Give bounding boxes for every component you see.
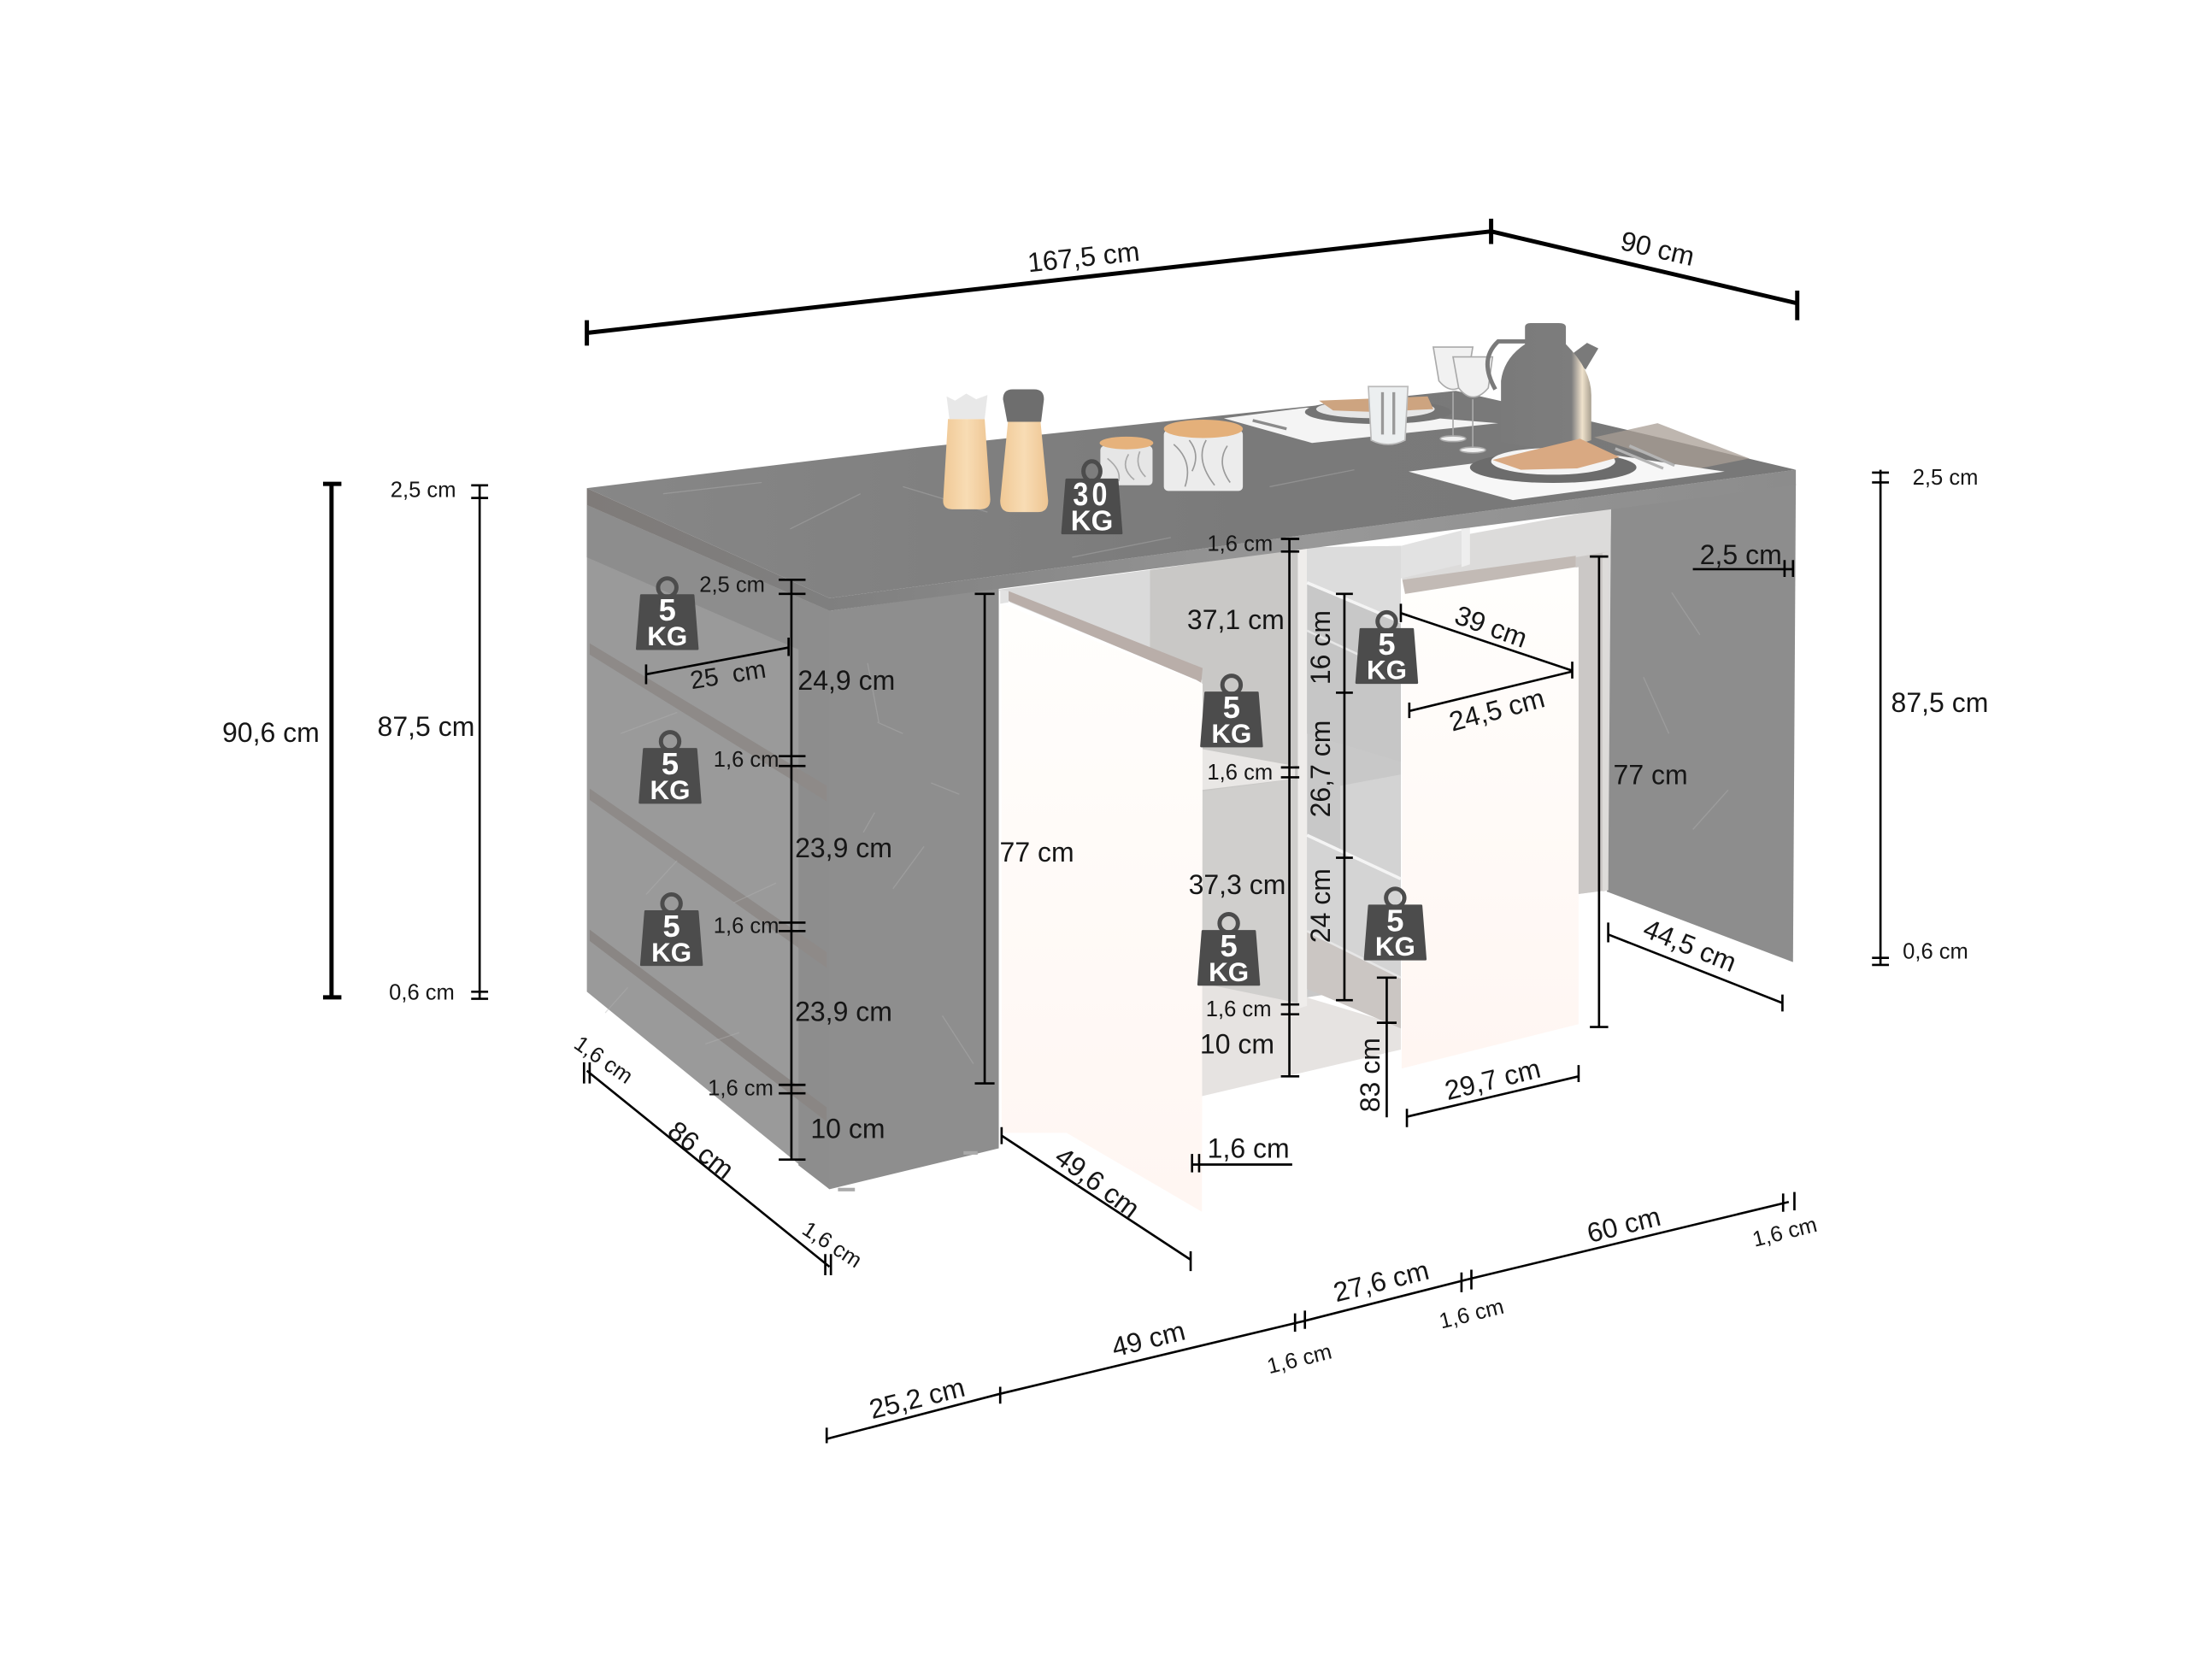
weight icon: 5 KG middle shelf [640,732,700,805]
weight icon: 5 KG drawer upper: KG [1367,656,1407,685]
dimension: right height stack: 87,5 cm [1891,687,1988,718]
dimension: shelving heights: 10 cm [810,1114,885,1144]
weight icon: 30 KG: KG [1071,505,1113,537]
dimension: bottom chain of widths: 1,6 cm [1437,1295,1506,1333]
shelf edges [590,644,827,1121]
weight icon: 5 KG middle shelf: KG [650,775,691,805]
table top front edge [587,470,1796,611]
dimension: drawer heights: 24 cm [1305,868,1336,943]
weight icon: 5 KG drawer lower: 5 [1386,903,1403,938]
weight icon: 5 KG drawer upper: 5 [1378,627,1396,662]
dimension: side panel thickness 2,5 cm [1693,539,1793,577]
dimension: shelving heights: 23,9 cm [795,997,892,1027]
dimension: overall depth 90 cm [1491,225,1797,321]
dimension: right height stack: 2,5 cm [1913,466,1978,490]
weight icon: 5 KG cabinet upper [1201,676,1262,749]
dimension: 44,5 cm [1609,913,1782,1011]
dimension: drawer heights: 16 cm [1305,610,1336,685]
weight icon: 5 KG middle shelf: 5 [662,746,679,781]
left cabinet interior [999,549,1401,1096]
weight icon: 5 KG drawer lower: KG [1375,932,1415,962]
dimension: centre compartment heights: 1,6 cm [1206,997,1272,1021]
dimension: centre compartment heights: 37,1 cm [1187,604,1285,635]
left door handle [1009,591,1203,683]
dimension: bottom chain of widths: 27,6 cm [1330,1255,1432,1308]
weight icon: 5 KG bottom shelf: KG [651,938,691,968]
dimension: left height stack: 87,5 cm [378,711,474,742]
dimension: door width 49,6 cm [1002,1127,1191,1271]
dimension: side depth 86 cm: 1,6 cm [797,1217,866,1273]
dimension: right door height 77 cm: 77 cm [1614,759,1688,790]
weight icon: 5 KG drawer lower [1365,889,1426,962]
dimension: left door height 77 cm: 77 cm [1000,837,1074,868]
dimension: 39 cm: 39 cm [1450,599,1532,654]
weight icon: 5 KG cabinet lower [1198,915,1259,987]
dimension: door thickness 1,6 cm [1192,1133,1292,1173]
dimension: right door height 77 cm [1590,556,1688,1027]
dimension: 39 cm [1401,599,1572,679]
marble jar small [1100,437,1153,485]
dimension: bottom chain of widths: 25,2 cm [866,1372,968,1425]
dimension: side depth 86 cm: 86 cm [662,1115,740,1185]
weight icon: 5 KG top shelf [637,579,697,651]
dimension: door thickness 1,6 cm: 1,6 cm [1208,1133,1290,1164]
left door [1000,590,1203,1212]
dimension: centre compartment heights: 1,6 cm [1207,532,1273,556]
dimension: shelf depth 25 cm: 25 cm [688,656,768,695]
dimension: left height stack: 2,5 cm [391,479,456,503]
centre divider panel [1297,547,1307,1009]
dimension: drawer heights: 26,7 cm [1305,721,1336,817]
tumbler glass [1368,386,1408,444]
dimension: 24,5 cm [1409,672,1572,738]
dimension: right height stack: 0,6 cm [1903,939,1968,963]
dimension: overall depth 90 cm: 90 cm [1618,225,1697,272]
dimension: 24,5 cm: 24,5 cm [1446,682,1548,738]
dimension: total height 90,6 cm [222,484,341,997]
dimension: left height stack [378,479,488,1004]
dimension: overall width 167,5 cm: 167,5 cm [1026,236,1141,278]
pepper mill dark [1000,390,1048,512]
weight icon: 30 KG: 30 [1073,476,1111,513]
dimension: shelving heights: 24,9 cm [797,665,895,696]
dimension: bottom chain of widths: 49 cm [1109,1315,1188,1363]
weight icon: 5 KG top shelf: 5 [659,592,676,627]
dimension: shelving heights: 1,6 cm [714,915,779,938]
weight icon: 5 KG bottom shelf: 5 [663,909,680,944]
dimension: centre compartment heights [1187,532,1299,1076]
dimension: 44,5 cm: 44,5 cm [1639,913,1741,978]
dimension: 29,7 cm [1407,1053,1579,1127]
dimension: shelving heights: 1,6 cm [714,748,779,772]
dimension: 83 cm: 83 cm [1355,1038,1385,1112]
marble jar large [1164,420,1243,491]
dimension: side depth 86 cm [569,1032,866,1275]
dimension: 29,7 cm: 29,7 cm [1442,1053,1544,1106]
back placemat and plate [1224,397,1498,443]
dimension: shelving heights: 23,9 cm [795,832,892,863]
right side panel [1607,484,1796,962]
dimension: shelving heights: 1,6 cm [708,1076,774,1100]
weight icon: 30 KG [1062,462,1121,537]
weight icon: 5 KG cabinet upper: 5 [1223,690,1240,725]
dimension: total height 90,6 cm: 90,6 cm [222,717,320,748]
open back interior [1397,508,1611,894]
wine glasses [1433,347,1492,453]
dimension: overall width 167,5 cm [587,219,1491,345]
dimension: bottom chain of widths: 60 cm [1584,1201,1663,1249]
weight icon: 5 KG cabinet lower: 5 [1221,928,1238,963]
dimension: door width 49,6 cm: 49,6 cm [1050,1141,1145,1224]
furniture: kitchen island [587,391,1796,1212]
weight icon: 5 KG drawer upper [1356,612,1417,685]
weight icon: 5 KG cabinet lower: KG [1209,957,1249,987]
kettle [1487,323,1598,448]
front placemat and plate [1409,438,1725,500]
dimension: side depth 86 cm: 1,6 cm [569,1032,637,1089]
dimension: shelving heights: 2,5 cm [699,573,765,597]
weight icon: 5 KG cabinet upper: KG [1211,719,1251,749]
right door [1402,556,1579,1068]
weight icon: 5 KG top shelf: KG [647,621,687,651]
dimension: left door height 77 cm [975,594,1074,1084]
dimension: 83 cm [1355,978,1397,1117]
dimension: shelf depth 25 cm [646,638,789,695]
dimension: left height stack: 0,6 cm [389,980,455,1004]
dimension: drawer heights [1305,594,1353,1000]
dimension: side panel thickness 2,5 cm: 2,5 cm [1700,539,1782,570]
left shelving side [587,505,829,1189]
weight icon: 5 KG bottom shelf [641,894,702,968]
pepper mill light [943,393,991,509]
dimension: bottom chain of widths: 1,6 cm [1750,1213,1820,1252]
dimension: right height stack [1872,466,1988,965]
right cabinet interior with drawers [1307,546,1401,1028]
dimension: centre compartment heights: 37,3 cm [1189,869,1285,900]
right door handle [1403,556,1576,594]
dimension: shelving heights [699,573,895,1160]
dimension: centre compartment heights: 1,6 cm [1207,761,1273,785]
front panel of shelving [829,588,999,1191]
dimension: bottom chain of widths: 1,6 cm [1265,1339,1334,1379]
dimension: centre compartment heights: 10 cm [1200,1029,1274,1060]
table top items [943,323,1725,512]
table top surface [587,391,1796,598]
dimension: bottom chain of widths [827,1192,1820,1443]
